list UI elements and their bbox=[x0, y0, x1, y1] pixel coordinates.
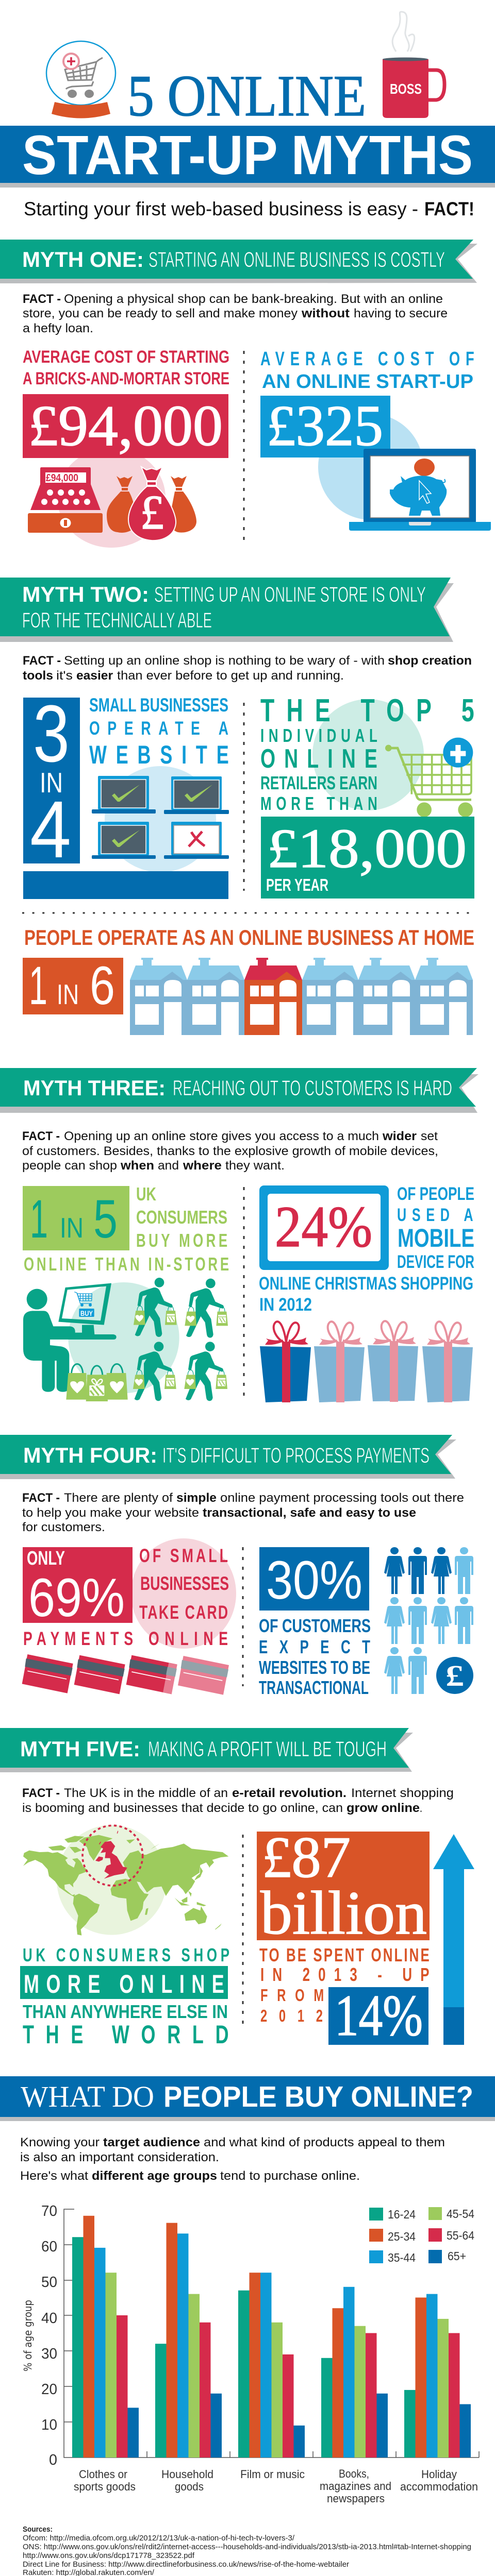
icon: boss mug with steam bbox=[383, 12, 444, 118]
stat: 1 in 5: 1 bbox=[30, 1189, 48, 1249]
heading: of small businesses take card payments online: OF SMALL bbox=[139, 1545, 228, 1566]
icon: pound coin bbox=[436, 1657, 473, 1694]
icon: four gift boxes, one highlighted bbox=[260, 1321, 473, 1402]
heading: to be spent online in 2013 up from 2012: IN 2013 - UP bbox=[260, 1964, 430, 1985]
text: sources: http://www.ons.gov.uk/ons/dcp171778_323522.pdf bbox=[23, 2551, 195, 2560]
axis labels: 50 bbox=[41, 2274, 57, 2291]
axes bbox=[64, 2209, 479, 2458]
text: sources bbox=[23, 2525, 471, 2576]
bars: household goods bbox=[155, 2223, 222, 2458]
text: fact five: The UK is in the middle of an bbox=[64, 1786, 228, 1800]
icon: boss mug with steam: BOSS bbox=[390, 81, 422, 97]
stat: only 69% bbox=[23, 1547, 133, 1628]
legend: 65+ bbox=[448, 2249, 466, 2263]
text: fact five: Internet shopping bbox=[351, 1786, 454, 1800]
heading: of people used a mobile device for online christmas shopping in 2012: IN 2012 bbox=[259, 1295, 312, 1315]
text: fact three: where bbox=[183, 1159, 222, 1173]
title: 5 online: 5 ONLINE bbox=[127, 64, 366, 128]
text: fact three: set bbox=[421, 1129, 438, 1143]
text: fact one: without bbox=[301, 307, 350, 320]
stat: 24% bbox=[259, 1185, 389, 1270]
banner: myth one bbox=[0, 240, 477, 283]
legend bbox=[369, 2207, 474, 2264]
icon: four shoppers walking with bags bbox=[133, 1278, 228, 1401]
legend: 16-24 bbox=[388, 2208, 416, 2221]
stat: 1 in 6: 6 bbox=[90, 956, 115, 1016]
text: intro to age groups: is also an important consideration. bbox=[20, 2150, 219, 2164]
category labels: newspapers bbox=[327, 2492, 385, 2505]
text: fact three: they want. bbox=[225, 1159, 285, 1173]
text: fact four: to help you make your website bbox=[22, 1506, 199, 1520]
text: fact three: when bbox=[120, 1159, 154, 1173]
heading: UK consumers buy more online than in-store bbox=[24, 1183, 229, 1275]
category labels: sports goods bbox=[74, 2480, 136, 2493]
panel: bricks-and-mortar cost: A BRICKS-AND-MORTAR STORE bbox=[23, 369, 229, 388]
category labels: goods bbox=[175, 2480, 204, 2493]
banner: myth two bbox=[0, 578, 454, 642]
banner: what do people buy online: WHAT DO bbox=[21, 2080, 154, 2113]
category labels bbox=[74, 2467, 478, 2505]
panel: online start-up cost: £325 bbox=[267, 394, 383, 458]
icon: four laptops, three with ticks bbox=[92, 776, 229, 859]
heading: UK consumers shop more online than anywhere else in the world: MORE ONLINE bbox=[24, 1970, 224, 1998]
heading: of small businesses take card payments online: ONLINE bbox=[148, 1628, 228, 1649]
icon: money bags bbox=[107, 467, 196, 540]
stat: 18,000 per year bbox=[261, 817, 474, 899]
text: fact four: FACT - bbox=[22, 1491, 60, 1505]
text: intro to age groups: Here's what bbox=[20, 2169, 88, 2183]
text: fact one: store, you can be ready to sell and make money bbox=[23, 307, 298, 320]
text: intro to age groups: different age groups bbox=[92, 2169, 217, 2183]
legend: 35-44 bbox=[388, 2251, 416, 2264]
panel: online start-up cost: AN ONLINE START-UP bbox=[262, 371, 473, 393]
icon: cash register bbox=[28, 467, 103, 533]
stat: 1 in 6: IN bbox=[57, 978, 79, 1010]
stat: 24%: 24% bbox=[275, 1195, 372, 1259]
text: fact four: online payment processing tools out there bbox=[220, 1491, 464, 1505]
stat: 1 in 5 bbox=[23, 1186, 129, 1250]
heading: of small businesses take card payments online: PAYMENTS bbox=[23, 1628, 133, 1649]
heading: UK consumers shop more online than anywhere else in the world bbox=[20, 1945, 229, 2049]
heading: UK consumers shop more online than anywhere else in the world: UK CONSUMERS SHOP bbox=[23, 1945, 229, 1965]
text: fact five: . bbox=[420, 1801, 422, 1815]
banner: myth three bbox=[0, 1068, 478, 1113]
stat: 14%: 14% bbox=[335, 1984, 423, 2048]
text: sources: Direct Line for Business: http://www.directlineforbusiness.co.uk/news/rise-of-the-home-webtailer bbox=[23, 2560, 349, 2569]
category labels: Film or music bbox=[240, 2468, 305, 2481]
panel: top 5 retailers bbox=[260, 693, 474, 899]
text: fact three: Opening up an online store gives you access to a much bbox=[64, 1129, 379, 1143]
legend: 25-34 bbox=[388, 2230, 416, 2243]
text: sources: ONS: http://www.ons.gov.uk/ons/rel/rdit2/internet-access---households-and-individuals/2013/stb-ia-2013.html#tab-Internet-shopping bbox=[23, 2543, 471, 2551]
text: fact three: FACT - bbox=[22, 1129, 60, 1143]
stat: 1 in 6: 1 bbox=[29, 956, 47, 1016]
panel: online start-up cost bbox=[260, 348, 491, 531]
bars: film or music bbox=[238, 2273, 305, 2458]
text: fact two: than ever before to get up and running. bbox=[117, 669, 344, 683]
heading: of customers expect websites to be transactional: OF CUSTOMERS bbox=[259, 1615, 371, 1636]
axis labels: 40 bbox=[41, 2310, 57, 2327]
text: intro to age groups: and what kind of products appeal to them bbox=[204, 2136, 445, 2149]
text: fact five: e-retail revolution. bbox=[232, 1786, 346, 1800]
banner: myth four: MYTH FOUR: bbox=[23, 1443, 157, 1467]
text: intro to age groups: tend to purchase online. bbox=[220, 2169, 360, 2183]
axis labels bbox=[22, 2203, 57, 2468]
heading: to be spent online in 2013 up from 2012 bbox=[259, 1945, 430, 2026]
category labels: Holiday bbox=[421, 2468, 457, 2481]
heading: small businesses operate a website: SMALL BUSINESSES bbox=[89, 694, 228, 716]
heading: of people used a mobile device for online christmas shopping in 2012: USED A bbox=[397, 1205, 473, 1225]
text: fact five bbox=[22, 1786, 454, 1815]
text: fact two: shop creation bbox=[388, 654, 472, 668]
stat: 87 billion: £87 bbox=[262, 1825, 351, 1890]
icon: shopping cart with plus bbox=[385, 738, 473, 817]
heading: UK consumers buy more online than in-store: UK bbox=[136, 1183, 156, 1205]
axis labels: 60 bbox=[41, 2239, 57, 2255]
text: fact two: Setting up an online shop is nothing to be wary of - with bbox=[64, 654, 385, 668]
panel: 87 billion spent online bbox=[257, 1825, 474, 2048]
heading: to be spent online in 2013 up from 2012: 2012 bbox=[260, 2007, 323, 2026]
bars: books, magazines and newspapers bbox=[321, 2287, 388, 2458]
axis labels: 30 bbox=[41, 2346, 57, 2362]
heading: of small businesses take card payments online: TAKE CARD bbox=[139, 1602, 228, 1623]
panel: 69% take card payments bbox=[22, 1538, 236, 1695]
panel: 24% mobile christmas shopping bbox=[259, 1184, 474, 1402]
text: fact five: grow online bbox=[346, 1801, 420, 1815]
banner: what do people buy online: PEOPLE BUY ONLINE? bbox=[163, 2080, 473, 2113]
text: intro to age groups: target audience bbox=[103, 2136, 200, 2149]
icon: person shopping on computer bbox=[23, 1282, 179, 1393]
divider: myth four columns bbox=[242, 1547, 243, 1686]
heading: small businesses operate a website bbox=[89, 694, 229, 769]
heading: of small businesses take card payments online: BUSINESSES bbox=[140, 1573, 229, 1594]
subtitle: FACT! bbox=[424, 198, 474, 219]
stat: 18,000 per year: PER YEAR bbox=[266, 875, 328, 894]
stat: 1 in 5: IN bbox=[60, 1212, 84, 1244]
stat: 30%: 30% bbox=[266, 1550, 362, 1611]
heading: the top 5 individual online retailers earn more than: ONLINE bbox=[260, 743, 377, 773]
axis labels: % of age group bbox=[22, 2300, 34, 2371]
banner: what do people buy online bbox=[0, 2076, 495, 2121]
icon: four credit cards, one faded bbox=[22, 1654, 229, 1695]
text: fact three: and bbox=[158, 1159, 179, 1173]
text: fact two bbox=[23, 654, 472, 683]
panel: bricks-and-mortar cost bbox=[23, 347, 229, 548]
banner: myth one: MYTH ONE: bbox=[22, 247, 144, 272]
icon: person shopping on computer: BUY bbox=[80, 1309, 93, 1317]
heading: small businesses operate a website: OPERATE A bbox=[89, 718, 228, 739]
heading: of people used a mobile device for online christmas shopping in 2012 bbox=[259, 1184, 474, 1315]
banner: start-up myths: START-UP MYTHS bbox=[22, 124, 473, 186]
divider: myth one columns bbox=[243, 351, 244, 540]
bars: clothes or sports goods bbox=[72, 2216, 139, 2458]
text: fact two: FACT - bbox=[23, 654, 61, 668]
arrow: growth bbox=[433, 1834, 474, 2045]
text: fact three: of customers. Besides, thanks to the explosive growth of mobile devices, bbox=[22, 1144, 438, 1158]
heading: UK consumers shop more online than anywhere else in the world: THE WORLD bbox=[23, 2021, 229, 2049]
panel: online start-up cost: AVERAGE COST OF bbox=[260, 348, 474, 370]
stat: 3 in 4: 4 bbox=[30, 785, 71, 875]
stat: 18,000 per year: £18,000 bbox=[267, 818, 467, 879]
text: fact two: easier bbox=[76, 669, 113, 683]
icon: pound coin: £ bbox=[446, 1659, 464, 1692]
stat: 1 in 5: 5 bbox=[93, 1189, 118, 1249]
heading: UK consumers shop more online than anywhere else in the world: THAN ANYWHERE ELSE IN bbox=[23, 2001, 228, 2022]
heading: the top 5 individual online retailers earn more than: RETAILERS EARN bbox=[260, 772, 377, 793]
text: fact four: transactional, safe and easy to use bbox=[203, 1506, 416, 1520]
icon: snow globe with shopping cart bbox=[46, 41, 116, 118]
icon: cash register: £94,000 bbox=[46, 472, 78, 484]
icon: world map with UK highlighted bbox=[23, 1825, 228, 1936]
text: fact five: FACT - bbox=[22, 1786, 60, 1800]
icon: three shopping bags bbox=[66, 1364, 128, 1401]
heading: of customers expect websites to be transactional bbox=[259, 1615, 371, 1698]
text: fact one: Opening a physical shop can be bank-breaking. But with an online bbox=[64, 292, 443, 306]
heading: UK consumers buy more online than in-store: ONLINE THAN IN-STORE bbox=[24, 1254, 229, 1275]
banner: myth four bbox=[0, 1435, 456, 1479]
divider: myth three columns bbox=[243, 1187, 244, 1396]
text: sources: Ofcom: http://media.ofcom.org.uk/2012/12/13/uk-a-nation-of-hi-tech-tv-lovers-3/ bbox=[23, 2534, 295, 2543]
stat: 1 in 6 bbox=[23, 956, 123, 1016]
heading: of customers expect websites to be transactional: WEBSITES TO BE bbox=[259, 1657, 370, 1678]
axis labels: 10 bbox=[41, 2417, 57, 2433]
stat: 3 in 4: 3 bbox=[33, 689, 70, 779]
text: fact one bbox=[23, 292, 448, 335]
stat: only 69%: 69% bbox=[28, 1568, 125, 1628]
heading: of people used a mobile device for online christmas shopping in 2012: MOBILE bbox=[398, 1224, 474, 1252]
icon: money bags: £ bbox=[140, 486, 164, 539]
text: fact three bbox=[22, 1129, 438, 1173]
heading: the top 5 individual online retailers earn more than: THE TOP 5 bbox=[260, 693, 474, 728]
icon: laptop with piggy bank bbox=[349, 449, 491, 531]
heading: the top 5 individual online retailers earn more than: MORE THAN bbox=[260, 793, 377, 814]
heading: of small businesses take card payments online bbox=[23, 1545, 229, 1649]
axis labels: 70 bbox=[41, 2203, 57, 2219]
text: fact four: There are plenty of bbox=[64, 1491, 173, 1505]
text: fact four bbox=[22, 1491, 464, 1534]
text: fact three: wider bbox=[382, 1129, 417, 1143]
heading: to be spent online in 2013 up from 2012: FROM bbox=[260, 1986, 324, 2005]
banner: myth two: FOR THE TECHNICALLY ABLE bbox=[22, 608, 212, 632]
axis labels: 20 bbox=[41, 2381, 57, 2398]
category labels: accommodation bbox=[400, 2480, 478, 2493]
heading: UK consumers buy more online than in-store: CONSUMERS bbox=[136, 1207, 227, 1228]
text: fact one: FACT - bbox=[23, 292, 61, 306]
text: fact three: people can shop bbox=[22, 1159, 117, 1173]
text: fact two: it's bbox=[56, 669, 73, 683]
heading: small businesses operate a website: WEBSITE bbox=[89, 741, 229, 769]
banner: myth five: MYTH FIVE: bbox=[20, 1737, 140, 1761]
heading: the top 5 individual online retailers earn more than bbox=[260, 693, 474, 814]
heading: UK consumers buy more online than in-store: BUY MORE bbox=[136, 1230, 227, 1251]
icon: row of six houses, one highlighted bbox=[130, 958, 473, 1035]
panel: bricks-and-mortar cost: £94,000 bbox=[28, 394, 223, 458]
banner: myth three: MYTH THREE: bbox=[23, 1076, 166, 1100]
text: fact four: simple bbox=[176, 1491, 217, 1505]
heading: of customers expect websites to be transactional: EXPECT bbox=[259, 1637, 370, 1657]
text: fact five: is booming and businesses that decide to go online, can bbox=[22, 1801, 343, 1815]
bars: holiday accommodation bbox=[404, 2294, 471, 2458]
subtitle: Starting your first web-based business is easy - bbox=[24, 198, 418, 219]
stat: 3 in 4: IN bbox=[40, 767, 63, 799]
legend: 55-64 bbox=[447, 2229, 474, 2242]
panel: 1 in 5 consumers bbox=[23, 1183, 229, 1401]
category labels: Household bbox=[161, 2468, 213, 2481]
stat: 87 billion: billion bbox=[260, 1878, 427, 1947]
panel: 30% expect transactional websites bbox=[259, 1547, 473, 1698]
heading: to be spent online in 2013 up from 2012: TO BE SPENT ONLINE bbox=[259, 1945, 430, 1965]
legend: 45-54 bbox=[447, 2207, 474, 2221]
axis labels: 0 bbox=[49, 2452, 57, 2468]
banner: myth two: MYTH TWO: bbox=[22, 582, 149, 606]
category labels: Clothes or bbox=[79, 2468, 127, 2481]
stat: 3 in 4 bbox=[23, 689, 80, 875]
category labels: magazines and bbox=[320, 2480, 391, 2493]
icon: people pictogram, 3 of 10 highlighted bbox=[384, 1547, 473, 1694]
text: sources: Sources: bbox=[23, 2525, 53, 2534]
heading: of customers expect websites to be transactional: TRANSACTIONAL bbox=[259, 1677, 369, 1698]
category labels: Books, bbox=[339, 2467, 369, 2480]
stat: 87 billion bbox=[257, 1825, 430, 1947]
divider: myth two columns bbox=[243, 703, 244, 891]
heading: the top 5 individual online retailers earn more than: INDIVIDUAL bbox=[260, 725, 377, 746]
panel: UK consumers shop more online bbox=[20, 1825, 229, 2049]
text: fact one: having to secure bbox=[354, 307, 448, 320]
stat: only 69%: ONLY bbox=[27, 1548, 65, 1569]
panel: bricks-and-mortar cost: AVERAGE COST OF STARTING bbox=[23, 347, 229, 367]
bar chart: online purchases by age group bbox=[22, 2203, 479, 2505]
panel: 3 in 4 small businesses bbox=[23, 689, 229, 899]
divider: myth five columns bbox=[242, 1835, 243, 2024]
text: fact one: a hefty loan. bbox=[23, 321, 93, 335]
text: fact four: for customers. bbox=[22, 1520, 105, 1534]
text: intro to age groups bbox=[20, 2136, 445, 2183]
text: intro to age groups: Knowing your bbox=[20, 2136, 100, 2149]
banner: myth five bbox=[0, 1728, 413, 1772]
text: fact two: tools bbox=[23, 669, 53, 683]
